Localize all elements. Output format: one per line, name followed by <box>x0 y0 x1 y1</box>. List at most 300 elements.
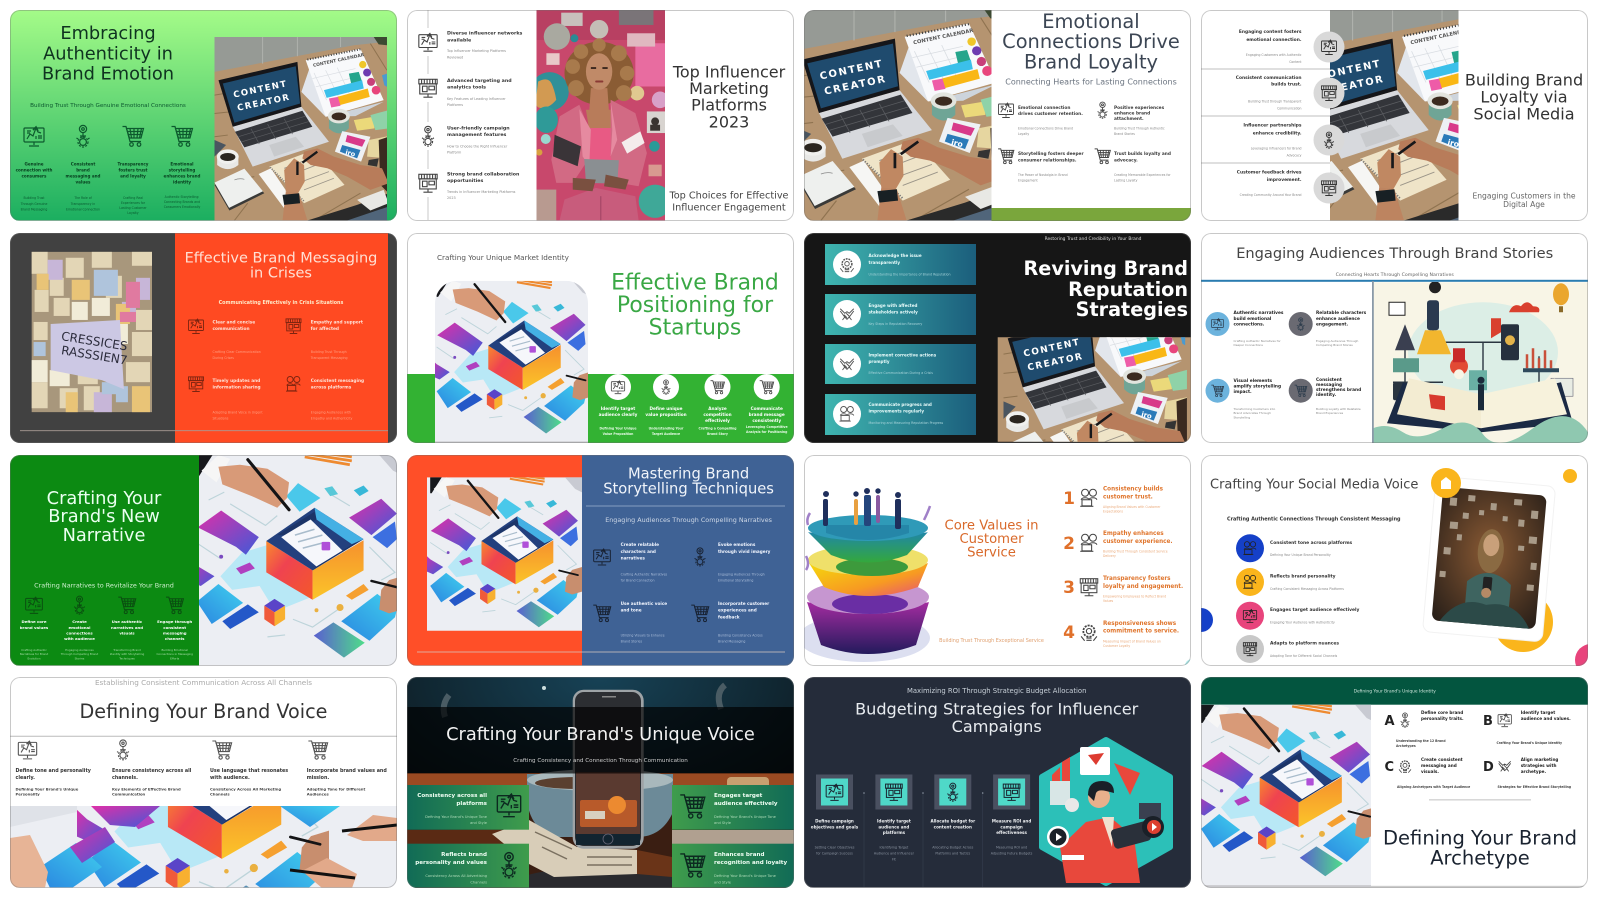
panel: Effective Brand Positioning for Startups <box>407 232 794 443</box>
key points: connection with <box>16 168 53 172</box>
step notes: Fit <box>892 858 897 862</box>
title <box>1383 827 1577 870</box>
panel: Embracing Authenticity in Brand Emotion <box>10 10 397 220</box>
subtitle: Engaging Audiences Through Compelling Narratives <box>605 516 773 524</box>
point notes: Brand Story <box>707 432 728 436</box>
point headings <box>1103 486 1183 635</box>
point headings <box>1236 29 1302 183</box>
point headings <box>1421 710 1571 774</box>
point headings: Evoke emotions <box>718 542 756 547</box>
point headings <box>1018 105 1171 164</box>
subtitle: Crafting Your Unique Market Identity <box>437 252 570 262</box>
point headings: emotional <box>69 625 90 630</box>
key points: values <box>76 180 91 184</box>
point notes: Crafting Authentic Narratives for <box>1234 338 1281 342</box>
point headings <box>1234 310 1367 398</box>
image: wall of sticky notes: RASSSIEN7 <box>60 343 128 367</box>
icons <box>26 596 183 614</box>
green info panels <box>407 785 794 888</box>
panel: Top Influencer Marketing Platforms 2023 <box>407 10 794 220</box>
point notes: Engaging Your Audience with Authenticity <box>1270 620 1335 624</box>
panel headings: Engages target <box>714 793 763 799</box>
point notes: Building Trust Through Authentic <box>1114 126 1165 130</box>
point notes: Brand Experiences <box>1316 410 1344 414</box>
point headings: impact. <box>1234 388 1252 394</box>
point notes: Storytelling <box>1234 415 1250 419</box>
point notes: Key Elements of Effective Brand <box>112 787 181 792</box>
point headings: Use authentic <box>112 619 143 624</box>
point notes <box>1232 338 1361 419</box>
point notes: Building Loyalty with Relatable <box>1316 406 1361 410</box>
point notes: Engaging Audiences <box>65 648 94 652</box>
image: wall of sticky notes: CRESSICES <box>60 329 128 353</box>
point notes: Understanding Your <box>649 426 684 430</box>
icons <box>593 548 709 622</box>
supporting notes: Consumers Emotionally <box>164 205 200 209</box>
supporting notes: Loyalty <box>127 211 139 215</box>
step notes: Key Steps in Reputation Recovery <box>868 322 922 326</box>
panel notes: and Style <box>470 821 488 825</box>
point headings: Consistent <box>1316 376 1342 382</box>
point notes: Building Trust Through <box>311 350 347 354</box>
subtitle: Crafting Narratives to Revitalize Your Brand <box>34 582 174 590</box>
point headings: Empathy and support <box>311 319 363 325</box>
key points: brand <box>76 168 90 172</box>
step headings: Define campaign <box>815 819 854 824</box>
title: Marketing <box>689 79 769 98</box>
title: Startups <box>649 315 741 340</box>
point headings: visuals <box>119 630 135 636</box>
point notes: Engaging Audiences Through <box>718 572 765 576</box>
subtitle: Building Trust Through Genuine Emotional Connections <box>30 103 186 109</box>
title: Reviving Brand <box>1024 256 1188 280</box>
numbers: 4 <box>1063 623 1075 643</box>
point notes: Building Trust through Transparent <box>1248 100 1302 104</box>
numbers: 2 <box>1063 534 1075 554</box>
point notes: Identity with Storytelling <box>110 652 144 656</box>
image: content creator desk <box>804 10 992 220</box>
panel headings: recognition and loyalty <box>714 860 787 866</box>
point notes: Crafting Authentic <box>21 648 47 652</box>
point headings: feedback <box>718 614 740 619</box>
point notes <box>20 648 193 660</box>
point headings: Consistency builds <box>1103 486 1164 492</box>
point headings: identity. <box>1316 392 1337 398</box>
point notes: Leveraging Influencers for Brand <box>1251 146 1302 150</box>
numbers <box>1063 489 1075 643</box>
panel notes: Defining Your Brand's Unique Tone <box>425 815 488 819</box>
point headings: Adapts to platform nuances <box>1270 640 1339 646</box>
key points: enhances brand <box>164 174 201 178</box>
point headings: Define core <box>21 619 47 624</box>
point headings: Reflects brand personality <box>1270 574 1336 580</box>
subtitle: Top Choices for Effective <box>668 190 789 202</box>
point notes: Expectations <box>1103 510 1123 514</box>
list notes: 2023 <box>447 196 456 200</box>
point notes: Engaging Audiences Through <box>1316 338 1358 342</box>
panel: Crafting Your Brand's Unique Voice <box>407 677 794 888</box>
point headings: brand values <box>20 625 49 630</box>
point notes: Connections in Messaging <box>156 652 193 656</box>
title <box>42 23 174 84</box>
point headings: clearly. <box>16 775 35 781</box>
point notes: Building Trust Through Consistent Service <box>1103 550 1168 554</box>
point headings: Responsiveness shows <box>1103 621 1177 627</box>
point headings: experiences and <box>718 608 757 613</box>
point notes <box>1240 53 1302 197</box>
list notes <box>446 49 516 200</box>
key points: messaging and <box>66 174 101 178</box>
point notes: Emotional Storytelling <box>718 578 753 582</box>
title <box>855 700 1139 736</box>
subtitle: Influencer Engagement <box>672 202 786 214</box>
point headings: consumer relationships. <box>1018 158 1077 164</box>
point headings: archetype. <box>1521 769 1546 774</box>
point notes: Loyalty <box>1018 132 1029 136</box>
point notes: The Power of Nostalgia in Brand <box>1017 173 1068 177</box>
point notes: Adapting Tone for Different <box>307 787 365 792</box>
subtitle: Connecting Hearts Through Compelling Narratives <box>1336 272 1454 278</box>
step headings <box>868 252 937 413</box>
panel headings: audience effectively <box>714 801 778 807</box>
image: isometric box <box>1201 704 1371 888</box>
list notes: Platforms <box>447 103 463 107</box>
supporting notes <box>20 195 200 215</box>
point notes: Measuring Impact of Brand Values on <box>1103 640 1161 644</box>
point headings: enhance brand <box>1114 110 1150 116</box>
supporting notes: Experiences for <box>121 201 146 205</box>
title: Customer <box>959 532 1024 547</box>
point headings: Use authentic voice <box>621 601 667 606</box>
point headings: Authentic narratives <box>1234 310 1284 316</box>
step headings: improvements regularly <box>868 408 924 413</box>
point notes: Building Emotional <box>162 648 188 652</box>
title: Platforms <box>691 96 767 114</box>
point headings: Communicate <box>751 406 783 410</box>
point headings: Customer feedback drives <box>1237 170 1302 176</box>
point notes: Emotional Connections Drive Brand <box>1018 126 1073 130</box>
point headings: Define unique <box>650 406 683 410</box>
point headings: enhance audience <box>1316 316 1360 322</box>
numbers: 1 <box>1063 489 1075 509</box>
title <box>47 488 162 546</box>
icon badges <box>1314 32 1344 204</box>
icon badges <box>605 374 780 400</box>
point headings: with audience. <box>210 775 250 781</box>
title: Brand's New <box>48 506 160 527</box>
point headings: value proposition <box>645 412 687 416</box>
point headings: information sharing <box>212 384 261 390</box>
point notes: Situations <box>212 416 229 420</box>
point headings: characters and <box>621 549 656 554</box>
point notes: Engaging Audiences with <box>311 410 351 414</box>
point headings: Consistent messaging <box>311 378 364 384</box>
point headings: strategies with <box>1521 763 1556 768</box>
key points: identity <box>173 180 191 184</box>
list headings: Strong brand collaboration <box>447 172 520 178</box>
letters: A <box>1384 714 1395 729</box>
title: Budgeting Strategies for Influencer <box>855 700 1139 719</box>
point headings <box>212 319 364 390</box>
icons <box>1080 489 1098 641</box>
point notes: Utilizing Visuals to Enhance <box>621 634 665 638</box>
point headings: audience clearly <box>599 412 638 416</box>
point headings: visuals. <box>1421 769 1439 774</box>
title: Reputation <box>1068 278 1188 300</box>
point notes: Target Audience <box>652 432 680 436</box>
point headings: Create relatable <box>621 542 659 547</box>
panel headings: Reflects brand <box>441 852 487 858</box>
point notes: Crafting Consistent Messaging Across Platforms <box>1270 587 1344 591</box>
subtitle: Defining Your Brand's Unique Identity <box>1354 689 1436 695</box>
list headings: Advanced targeting and <box>447 78 512 84</box>
step icons <box>833 250 861 428</box>
point headings: competition <box>703 412 732 416</box>
point headings: strengthens brand <box>1316 386 1361 392</box>
point notes: Brand Messaging <box>718 640 745 644</box>
step headings: Identify target <box>877 819 911 824</box>
step headings: transparently <box>868 260 900 264</box>
panel headings: personality and values <box>415 860 488 866</box>
point notes: Empowering Employees to Reflect Brand <box>1103 594 1166 598</box>
icon badges <box>1236 534 1264 663</box>
point notes <box>600 424 788 436</box>
point notes: Aligning Brand Values with Customer <box>1103 505 1161 509</box>
icons <box>1399 713 1511 773</box>
point notes: Adapting Tone for Different Social Channels <box>1270 654 1338 658</box>
step headings: Measure ROI and <box>992 819 1031 824</box>
step headings: Allocate budget for <box>930 819 975 824</box>
point headings: Empathy enhances <box>1103 531 1164 537</box>
panel notes: and Style <box>714 881 732 885</box>
point headings: amplify storytelling <box>1234 383 1281 389</box>
step notes: Allocating Budget Across <box>932 846 974 850</box>
icons <box>18 740 328 760</box>
step headings: stakeholders actively <box>868 309 918 314</box>
step notes: Monitoring and Measuring Reputation Progress <box>868 420 944 424</box>
panel headings: Consistency across all <box>417 793 487 799</box>
panel: Emotional Connections Drive Brand Loyalty <box>804 10 1191 220</box>
step headings: Implement corrective actions <box>868 352 937 357</box>
green band <box>407 374 794 444</box>
point headings: connections. <box>1234 321 1265 327</box>
letters: B <box>1483 714 1493 729</box>
panel: Core Values in Customer Service <box>804 455 1191 666</box>
illustration: layered funnel with team <box>798 488 930 662</box>
title: Defining Your Brand Voice <box>80 700 327 723</box>
image: content creator desk <box>214 37 387 220</box>
point headings: across platforms <box>311 384 352 390</box>
supporting notes: The Role of <box>73 196 93 200</box>
supporting notes: Building Trust <box>23 196 45 200</box>
step headings: Engage with affected <box>868 302 918 308</box>
image: wall of sticky notes <box>32 252 152 412</box>
step headings: promptly <box>868 358 890 364</box>
point headings: channels. <box>112 775 138 781</box>
point notes: for Brand Connection <box>621 578 655 582</box>
step notes: Understanding the Importance of Brand Reputation <box>868 272 950 276</box>
key points: and loyalty <box>120 174 146 178</box>
point notes: Crafting a Compelling <box>699 426 736 430</box>
point notes: Techniques <box>118 656 135 660</box>
list headings: management features <box>447 132 507 138</box>
point notes: Efforts <box>170 656 180 660</box>
point headings: Visual elements <box>1234 378 1273 384</box>
point headings: Use language that resonates <box>210 768 288 774</box>
title <box>185 250 377 281</box>
point notes: Content <box>1289 60 1302 64</box>
point notes: Strategies for Effective Brand Storytelling <box>1498 785 1571 789</box>
step notes: Setting Clear Objectives <box>815 846 855 850</box>
title: Top Influencer <box>672 62 786 82</box>
panel notes: Channels <box>470 881 487 885</box>
title: Defining Your Brand <box>1383 827 1577 850</box>
title: Emotional <box>1042 10 1140 33</box>
title: Crafting Your Social Media Voice <box>1210 478 1418 492</box>
point notes: Transforming Brand <box>112 648 141 652</box>
point notes: Brand Stories <box>1114 132 1135 136</box>
image: woman with tablet <box>536 10 665 220</box>
point notes: Value Proposition <box>603 432 633 436</box>
subtitle: Restoring Trust and Credibility in Your Brand <box>1045 236 1142 242</box>
list notes: Key Features of Leading Influencer <box>447 97 506 101</box>
panel notes: Defining Your Brand's Unique Tone <box>714 874 777 878</box>
point headings: narratives <box>621 556 645 560</box>
title: Service <box>967 546 1016 560</box>
point notes: Transparent Messaging <box>310 356 348 360</box>
illustration: hexagon videographer <box>1042 740 1170 883</box>
point notes: Creating Community Around Your Brand <box>1240 193 1302 197</box>
point headings: customer experience. <box>1103 539 1173 545</box>
point headings: connections <box>66 630 93 636</box>
title: Building Brand <box>1465 70 1583 90</box>
point headings: Identify target <box>601 406 635 410</box>
image: content creator desk <box>1330 10 1458 220</box>
title: Core Values in <box>944 518 1039 534</box>
letters: C <box>1384 760 1394 775</box>
point headings <box>20 619 193 641</box>
title: Storytelling Techniques <box>603 480 774 498</box>
title: Effective Brand <box>611 270 779 295</box>
point notes: Crafting Authentic Narratives <box>621 572 668 576</box>
list headings: User-friendly campaign <box>447 126 510 132</box>
step headings: Acknowledge the issue <box>868 252 922 258</box>
title: Brand Loyalty <box>1024 50 1158 74</box>
point notes: Archetypes <box>1396 744 1416 748</box>
point headings: Incorporate customer <box>718 601 770 606</box>
step headings: effectiveness <box>996 830 1027 835</box>
point notes: During Crises <box>212 356 234 360</box>
icon badges <box>1206 312 1313 402</box>
point headings: Ensure consistency across all <box>112 768 192 774</box>
point notes: Leveraging Competitive <box>746 424 788 428</box>
point notes: Defining Your Brand's Unique <box>16 787 79 792</box>
list headings: opportunities <box>447 178 483 184</box>
image: isometric box <box>427 477 582 631</box>
subtitle <box>668 190 789 214</box>
image: isometric box <box>199 455 397 666</box>
list notes: Platform <box>447 150 462 154</box>
panel: Defining Your Brand Voice <box>10 677 397 888</box>
title band <box>407 707 794 774</box>
step notes <box>868 272 950 424</box>
panel: Building Brand Loyalty via Social Media <box>1201 10 1588 220</box>
point headings: Influencer partnerships <box>1243 122 1302 128</box>
key points: Transparency <box>118 162 149 166</box>
panel: Effective Brand Messaging in Crises <box>10 232 397 443</box>
title: Connections Drive <box>1002 30 1180 53</box>
point notes: Deeper Connections <box>1234 342 1263 346</box>
point headings: consistently <box>752 418 781 422</box>
point notes: Customer Loyalty <box>1103 644 1130 648</box>
point headings: loyalty and engagement. <box>1103 584 1183 590</box>
point notes: Lasting Loyalty <box>1114 178 1138 182</box>
point headings: customer trust. <box>1103 494 1153 500</box>
point headings: brand message <box>749 412 785 416</box>
subtitle <box>1472 192 1576 209</box>
step notes: for Campaign Success <box>816 852 853 856</box>
point headings: Incorporate brand values and <box>307 768 387 774</box>
point headings: messaging and <box>1421 763 1457 768</box>
supporting notes: Brand Messaging <box>21 208 47 212</box>
point notes: Transforming Customers into <box>1232 406 1276 410</box>
title <box>1002 10 1180 74</box>
photo frame: woman with phone <box>1423 476 1556 642</box>
key points <box>16 162 201 184</box>
point headings: drives customer retention. <box>1018 111 1083 117</box>
point notes <box>1270 553 1344 658</box>
supporting notes: Authentic Storytelling: <box>165 195 199 199</box>
list headings: Diverse influencer networks <box>447 30 523 36</box>
title <box>603 466 774 498</box>
step notes: Platforms and Tactics <box>935 852 971 856</box>
point headings: attachment. <box>1114 116 1144 122</box>
point notes <box>1017 126 1171 182</box>
point headings: Engaging content fosters <box>1239 29 1302 35</box>
step notes: Identifying Target <box>880 846 909 850</box>
point notes: Brand Advocates Through <box>1234 410 1271 414</box>
point headings <box>621 542 771 619</box>
icons <box>188 318 301 391</box>
point headings: Align marketing <box>1521 757 1558 762</box>
title <box>611 270 779 340</box>
step notes: Audience and Influencer <box>874 852 915 856</box>
letters <box>1384 714 1494 775</box>
image: isometric box <box>435 280 588 443</box>
title <box>1024 256 1188 320</box>
point headings: Create <box>72 619 87 624</box>
point headings: messaging <box>163 630 187 636</box>
point notes <box>212 350 352 420</box>
point notes <box>621 572 765 644</box>
subtitle: Crafting Consistency and Connection Through Communication <box>513 758 688 764</box>
title: Strategies <box>1076 298 1188 320</box>
key points: Genuine <box>24 162 44 166</box>
subtitle: Maximizing ROI Through Strategic Budget Allocation <box>907 687 1086 695</box>
key points: Emotional <box>170 162 194 166</box>
point notes: Defining Your Unique Brand Personality <box>1270 553 1331 557</box>
point headings: emotional connection. <box>1246 37 1302 43</box>
list notes: Top Influencer Marketing Platforms <box>446 49 506 53</box>
point notes: Audiences <box>307 792 329 797</box>
supporting notes: Connecting Brands and <box>164 200 200 204</box>
key points: fosters trust <box>119 168 148 172</box>
point notes <box>1103 505 1168 648</box>
point headings: communication <box>212 326 250 332</box>
point headings: audience and values. <box>1521 716 1571 721</box>
point headings: engagement. <box>1316 321 1348 327</box>
subtitle: Crafting Authentic Connections Through Consistent Messaging <box>1227 516 1401 522</box>
